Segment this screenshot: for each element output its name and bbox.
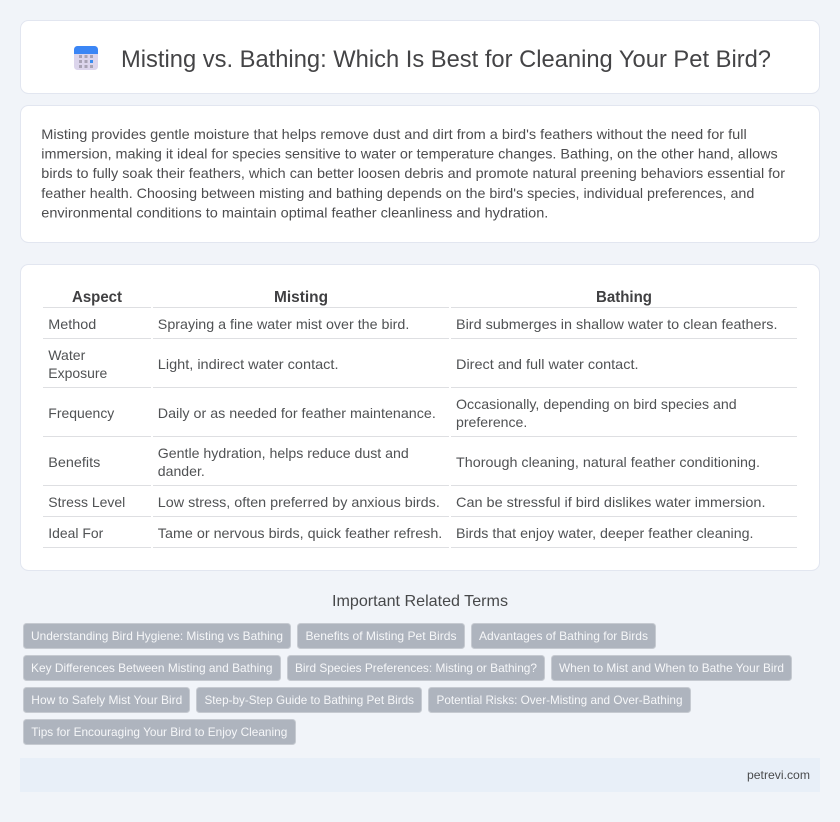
text block: introduction paragraph: immersion, making it ideal for species sensitive to water or temperature changes. Bathing, on the other hand, allows — [41, 146, 778, 162]
tag — [472, 624, 656, 648]
footer source text: petrevi.com — [747, 768, 810, 782]
tag — [24, 624, 290, 648]
row: benefits — [48, 445, 760, 479]
row: water exposure: Exposure — [48, 365, 108, 381]
tag — [24, 656, 280, 680]
tag: Benefits of Misting Pet Birds — [306, 629, 456, 643]
tag: Key Differences Between Misting and Bathing — [31, 661, 272, 675]
title: Misting vs. Bathing: Which Is Best for Cleaning Your Pet Bird? — [121, 46, 771, 73]
row: method: Method — [48, 316, 96, 332]
row: ideal for — [48, 525, 754, 541]
row: benefits: Thorough cleaning, natural feather conditioning. — [456, 454, 760, 470]
row: stress level: Low stress, often preferred by anxious birds. — [158, 494, 440, 510]
text block: introduction paragraph: feather health. Choosing between misting and bathing depends on the bird's species, individual preferences, and — [41, 185, 754, 201]
panel: introduction — [20, 106, 820, 242]
panel: comparison table — [20, 264, 820, 570]
footer — [20, 758, 820, 792]
tag: Advantages of Bathing for Birds — [479, 629, 648, 643]
row: method: Spraying a fine water mist over the bird. — [158, 316, 409, 332]
tag: Understanding Bird Hygiene: Misting vs Bathing — [31, 629, 283, 643]
tag — [24, 688, 190, 712]
row: ideal for: Ideal For — [48, 525, 104, 541]
tag: Bird Species Preferences: Misting or Bathing? — [295, 661, 537, 675]
row: stress level: Can be stressful if bird dislikes water immersion. — [456, 494, 766, 510]
tag — [24, 720, 296, 744]
row: water exposure: Direct and full water contact. — [456, 356, 638, 372]
tag — [428, 688, 690, 712]
row: frequency: Frequency — [48, 405, 114, 421]
row: frequency: preference. — [456, 414, 527, 430]
row: water exposure — [48, 347, 639, 381]
table header row — [72, 289, 652, 306]
row: method: Bird submerges in shallow water to clean feathers. — [456, 316, 778, 332]
table header row: Aspect — [72, 289, 123, 306]
tag: How to Safely Mist Your Bird — [31, 693, 182, 707]
row: benefits: Gentle hydration, helps reduce dust and — [158, 445, 409, 461]
icon: calendar — [74, 46, 98, 70]
row: frequency — [48, 396, 737, 430]
row: stress level — [48, 494, 766, 510]
table header row: Misting — [274, 289, 328, 306]
row: frequency: Occasionally, depending on bird species and — [456, 396, 737, 412]
text block: introduction paragraph: birds to fully soak their feathers, which can better loosen debris and promote natural preening behaviors essential for — [41, 165, 785, 181]
row: ideal for: Tame or nervous birds, quick feather refresh. — [158, 525, 442, 541]
tag: When to Mist and When to Bathe Your Bird — [559, 661, 784, 675]
tag — [196, 688, 422, 712]
tag list: related terms — [24, 624, 792, 744]
table header row: Bathing — [596, 289, 652, 306]
tag — [552, 656, 792, 680]
panel: header — [20, 20, 820, 94]
heading: important related terms: Important Related Terms — [332, 593, 508, 610]
tag: Potential Risks: Over-Misting and Over-Bathing — [436, 693, 682, 707]
row: water exposure: Light, indirect water contact. — [158, 356, 338, 372]
row: benefits: dander. — [158, 463, 205, 479]
row: ideal for: Birds that enjoy water, deeper feather cleaning. — [456, 525, 754, 541]
tag — [288, 656, 544, 680]
row: water exposure: Water — [48, 347, 86, 363]
row: benefits: Benefits — [48, 454, 100, 470]
text block: introduction paragraph: environmental conditions to maintain optimal feather cleanliness and hydration. — [41, 204, 548, 220]
row: stress level: Stress Level — [48, 494, 125, 510]
text block: introduction paragraph: Misting provides gentle moisture that helps remove dust and dirt from a bird's feathers without the need for full — [41, 126, 747, 142]
tag — [298, 624, 464, 648]
tag: Tips for Encouraging Your Bird to Enjoy Cleaning — [31, 725, 287, 739]
row: method — [48, 316, 778, 332]
row: frequency: Daily or as needed for feather maintenance. — [158, 405, 436, 421]
text block: introduction paragraph — [41, 126, 785, 220]
tag: Step-by-Step Guide to Bathing Pet Birds — [204, 693, 414, 707]
